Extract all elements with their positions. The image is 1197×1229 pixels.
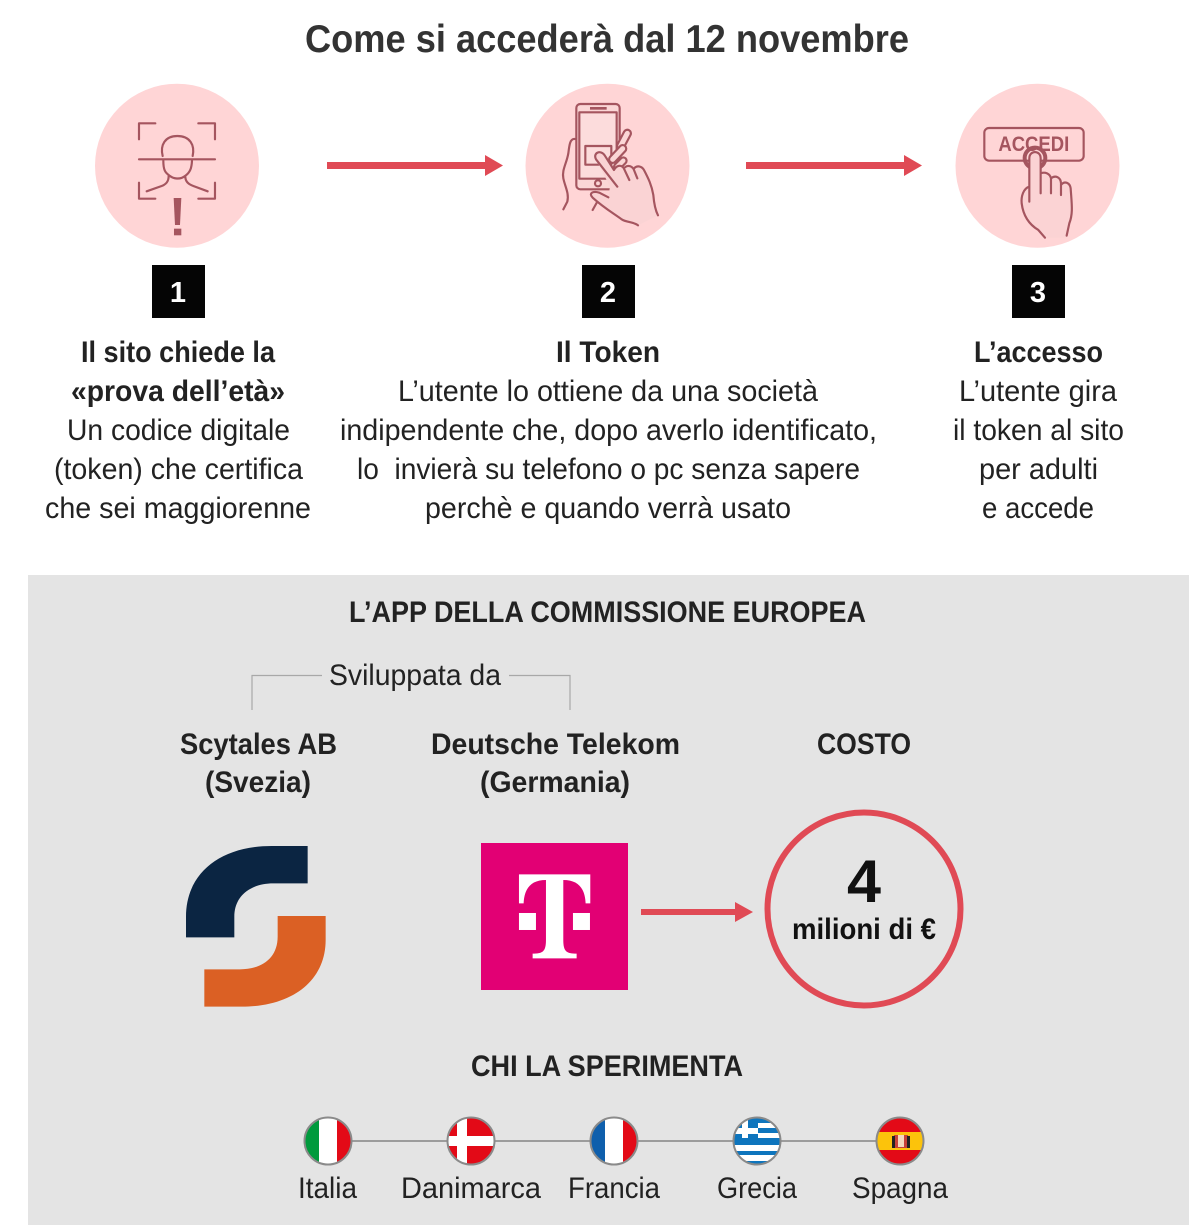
text block: step 2: L’utente lo ottiene da una società xyxy=(398,375,818,408)
icon: finger pressing ACCEDI button in circle xyxy=(956,84,1120,248)
flag: Italia xyxy=(304,1117,352,1165)
title: Come si accederà dal 12 novembre xyxy=(305,18,909,61)
step 1 number xyxy=(152,265,205,318)
country labels: Italia xyxy=(298,1172,357,1205)
country labels: Spagna xyxy=(852,1172,948,1205)
panel: European Commission app xyxy=(28,575,1189,1225)
text block: step 2: lo invierà su telefono o pc senza sapere xyxy=(357,453,860,486)
country labels: Grecia xyxy=(717,1172,797,1205)
text block: step 1: Un codice digitale xyxy=(67,414,290,447)
step 1 number: 1 xyxy=(170,277,186,309)
text block: step 3: L’utente gira xyxy=(959,375,1117,408)
text block: step 2: Il Token xyxy=(556,336,660,369)
text block: step 1: «prova dell’età» xyxy=(71,375,285,408)
timeline of test countries xyxy=(298,1117,948,1205)
text block: step 1: che sei maggiorenne xyxy=(45,492,311,525)
arrow: Telekom to cost xyxy=(641,902,753,922)
arrow: step 2 to step 3 xyxy=(746,155,922,176)
step 3 number: 3 xyxy=(1030,277,1046,309)
text block: step 3: L’accesso xyxy=(974,336,1103,369)
text block: step 3: per adulti xyxy=(979,453,1098,486)
cost circle: milioni di € xyxy=(792,913,936,946)
icon: hands with phone in circle xyxy=(526,84,690,248)
text block: step 1: Il sito chiede la xyxy=(81,336,275,369)
developer: Deutsche Telekom: (Germania) xyxy=(480,766,630,799)
panel heading: L’APP DELLA COMMISSIONE EUROPEA xyxy=(349,596,866,629)
icon: finger pressing ACCEDI button in circle: ACCEDI xyxy=(998,132,1069,156)
developer: Deutsche Telekom xyxy=(431,728,680,799)
flag: Spagna xyxy=(876,1117,924,1165)
text block: step 3 xyxy=(953,336,1124,525)
logo: Telekom xyxy=(481,843,628,990)
step 3 number xyxy=(1012,265,1065,318)
cost heading: COSTO xyxy=(817,728,911,761)
developer: Scytales AB xyxy=(180,728,337,799)
text block: step 2: perchè e quando verrà usato xyxy=(425,492,791,525)
logo: Scytales xyxy=(186,846,326,1007)
icon: face scan in circle xyxy=(95,84,259,248)
text block: step 2: indipendente che, dopo averlo identificato, xyxy=(340,414,877,447)
bracket: developed by xyxy=(252,659,570,710)
flag: Danimarca xyxy=(447,1117,495,1165)
flag: Grecia xyxy=(733,1117,781,1165)
developer: Scytales AB: Scytales AB xyxy=(180,728,337,761)
country labels: Danimarca xyxy=(401,1172,541,1205)
text block: step 3: e accede xyxy=(982,492,1094,525)
bracket: developed by: Sviluppata da xyxy=(329,659,501,692)
text block: step 1: (token) che certifica xyxy=(54,453,303,486)
text block: step 3: il token al sito xyxy=(953,414,1124,447)
cost circle: 4 xyxy=(847,848,882,915)
flag: Francia xyxy=(590,1117,638,1165)
heading: who tests it: CHI LA SPERIMENTA xyxy=(471,1050,743,1083)
step 2 number xyxy=(582,265,635,318)
text block: step 1 xyxy=(45,336,311,525)
arrow: step 1 to step 2 xyxy=(327,155,503,176)
developer: Deutsche Telekom: Deutsche Telekom xyxy=(431,728,680,761)
country labels xyxy=(298,1172,948,1205)
country labels: Francia xyxy=(568,1172,660,1205)
text block: step 2 xyxy=(340,336,877,525)
cost circle xyxy=(768,812,960,1006)
step 2 number: 2 xyxy=(600,277,616,309)
developer: Scytales AB: (Svezia) xyxy=(205,766,311,799)
